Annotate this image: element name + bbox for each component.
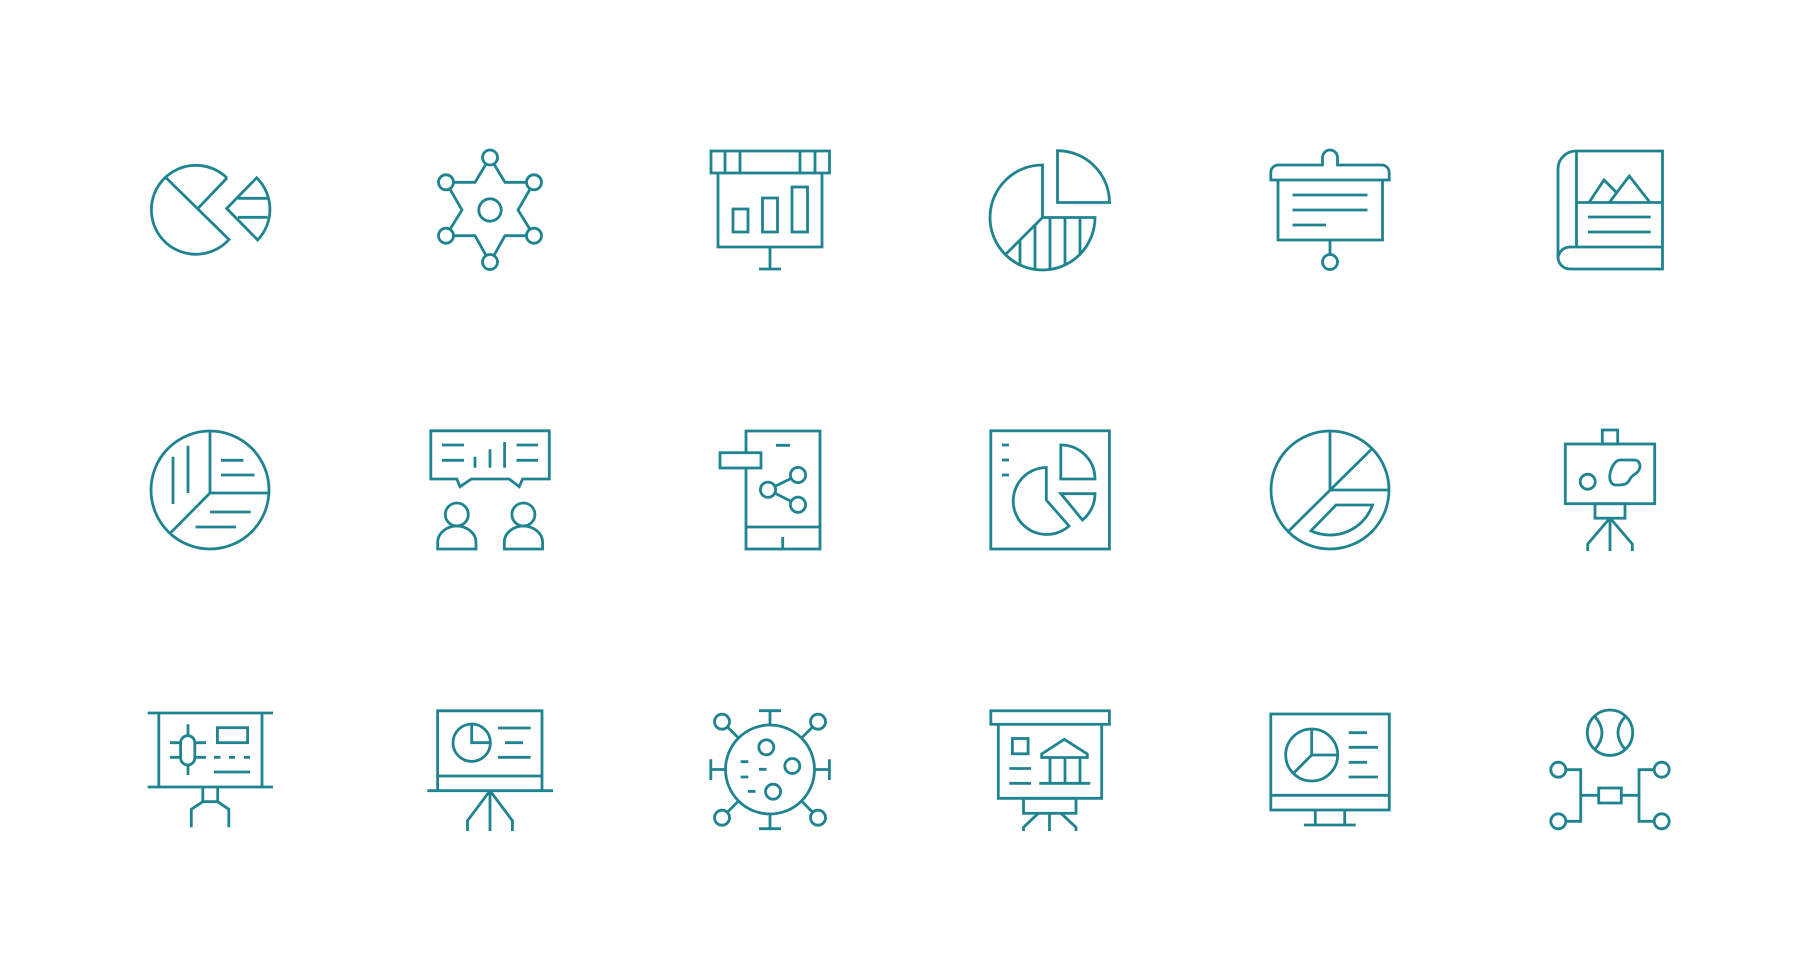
icon: presentation board with bar chart: [711, 151, 830, 269]
icon: six-point star network: [438, 150, 542, 270]
icon: easel with pie chart slide: [427, 711, 553, 831]
icon: pie chart with text lines: [151, 431, 269, 549]
icon: report page with pie chart: [991, 431, 1109, 549]
icon: desktop monitor with pie chart: [1271, 714, 1389, 825]
icon: baseball with network diagram: [1551, 710, 1669, 829]
icon: board with candlestick chart: [148, 713, 273, 827]
icon: two people with speech bubble: [431, 431, 549, 549]
icon: book with mountains: [1558, 151, 1662, 269]
icon: easel with map: [1565, 430, 1655, 551]
icon: virus: [711, 711, 829, 829]
icon: projector screen with text: [1271, 150, 1389, 270]
icon: pie chart with inset sector: [1271, 431, 1389, 549]
icon: presentation board with bank building: [991, 711, 1109, 831]
icon: pie chart with hatched sector: [990, 151, 1110, 270]
icon: smartphone with share symbol: [720, 431, 820, 549]
icon: pie chart with striped slice: [151, 165, 270, 254]
